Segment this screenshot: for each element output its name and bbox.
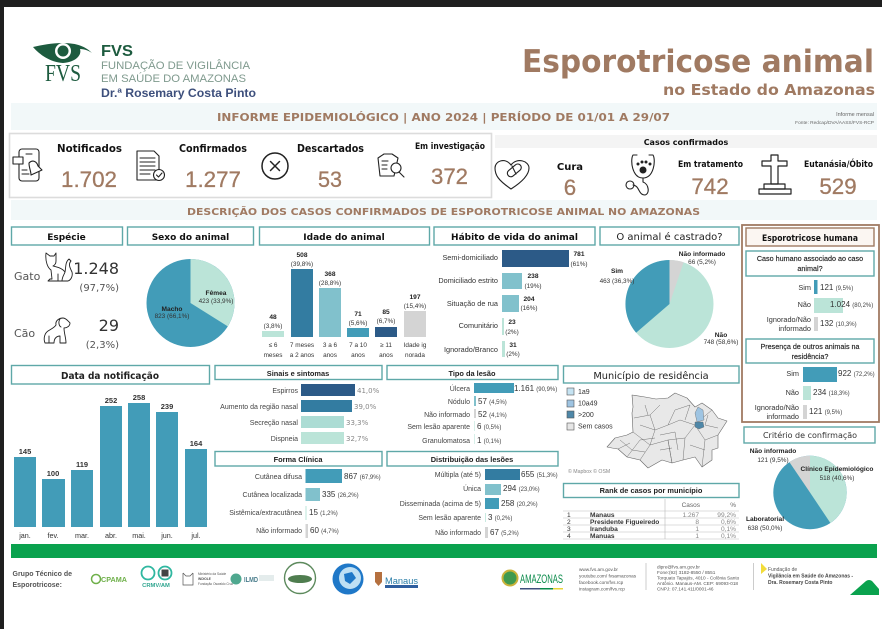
bar chart: symptoms: Aumento da região nasal [220, 404, 298, 411]
footer: FVS signature: Vigilância em Saúde do Amazonas - [768, 574, 853, 580]
bar chart: symptoms: Espirros [272, 388, 298, 395]
bar chart: lifestyle [438, 250, 588, 358]
bar chart: age: 85 [382, 309, 390, 316]
bar chart: months: abr. [105, 531, 117, 540]
footer: contact address: dipre@fvs.am.gov.br [657, 564, 700, 570]
question box: associated human case: Caso humano associado ao caso [757, 254, 863, 263]
section heading band: DESCRIÇÃO DOS CASOS CONFIRMADOS DE ESPOROTRICOSE ANIMAL NO AMAZONAS [187, 205, 700, 218]
bar chart: age: a 2 anos [290, 352, 314, 359]
bar chart: months: 100 [47, 469, 59, 478]
table: ranking: 3 [567, 526, 571, 533]
bar chart: months: 258 [133, 393, 145, 402]
bar chart: other animals: Ignorado/Não [755, 403, 799, 412]
icon: notification clipboard [13, 149, 42, 181]
bar chart: months: jan. [18, 531, 31, 540]
bar chart: lesion distribution: Única [463, 484, 481, 493]
bar chart: lesion distribution: Disseminada (acima de 5) [400, 501, 481, 508]
pie chart: neutered: Sim [611, 268, 623, 275]
species: dog: Cão [14, 327, 35, 340]
bar chart: age: anos [379, 352, 393, 359]
bar chart: other animals: Não [786, 388, 799, 397]
bar chart: lifestyle: Comunitário [459, 321, 498, 330]
heading: animal sex: Sexo do animal [152, 233, 229, 243]
bar chart: lifestyle: 781 [573, 251, 585, 258]
title [522, 44, 875, 99]
footer: web and social links [579, 567, 637, 592]
footer: FVS signature [753, 563, 879, 595]
species: cat: (97,7%) [79, 283, 119, 294]
bar chart: associated human case: 1.024 (80,2%) [830, 300, 873, 309]
logo: FVS: FVS [101, 43, 133, 60]
footer: web and social links: instagram.com/fvs.rcp [579, 586, 625, 592]
heading: species: Espécie [47, 232, 86, 243]
heading: signs and symptoms [215, 366, 382, 380]
bar chart: lifestyle: 238 [527, 273, 539, 280]
panel: human sporotrichosis [742, 225, 879, 422]
bar chart: lesion distribution: Múltipla (até 5) [435, 472, 481, 479]
map: Amazonas municipalities: © Mapbox © OSM [568, 468, 610, 475]
pie chart: sex: Macho [162, 306, 182, 313]
cure total [557, 162, 583, 200]
heading: signs and symptoms: Sinais e sintomas [267, 369, 329, 378]
bar chart: clinical form: Não informado [256, 528, 302, 535]
bar chart: other animals: 121 (9,5%) [809, 407, 842, 416]
bar chart: lifestyle: 204 [523, 296, 535, 303]
bar chart: age: (15,4%) [404, 303, 426, 310]
table: ranking: 1 [567, 512, 571, 519]
pie chart: neutered: Não [715, 332, 727, 339]
bar chart: age: 7 a 10 [349, 342, 367, 349]
pie chart: sex [146, 259, 235, 347]
species: cat [14, 253, 119, 294]
footer: web and social links: www.fvs.am.gov.br [579, 567, 618, 572]
bar chart: lesion type: 6 (0,5%) [477, 422, 501, 431]
pie chart: sex: 423 (33,9%) [199, 298, 233, 305]
heading: clinical form [215, 452, 382, 466]
question box: associated human case: animal? [797, 264, 823, 273]
heading: municipality: Município de residência [593, 370, 709, 382]
panel: species [12, 227, 122, 351]
pie chart: criterion: 638 (50,0%) [748, 525, 782, 532]
bar chart: other animals [755, 367, 875, 421]
panel: animal age [260, 227, 430, 359]
discarded total: 53 [318, 167, 342, 192]
table: ranking: Casos [682, 502, 701, 509]
cure total: Cura [557, 162, 583, 173]
bar chart: associated human case: Ignorado/Não [767, 315, 811, 324]
pie chart: criterion: 121 (9,5%) [757, 457, 789, 464]
bar chart: other animals: 234 (18,3%) [813, 388, 850, 397]
heading: lesion type: Tipo da lesão [448, 369, 496, 378]
bar chart: months: jul. [190, 531, 201, 540]
table: ranking: Iranduba [590, 526, 618, 533]
bar chart: age: Idade ig [404, 342, 427, 349]
bar chart: associated human case: 121 (9,5%) [820, 283, 853, 292]
bar chart: associated human case: Não [798, 300, 811, 309]
bar chart: lesion distribution: Sem lesão aparente [418, 515, 481, 522]
pie chart: neutered: 66 (5,2%) [688, 259, 716, 266]
footer: contact address [646, 563, 740, 592]
bar chart: lifestyle: (61%) [570, 261, 588, 268]
question box: other animals [746, 339, 874, 363]
bar chart: lesion type: Não informado [424, 412, 470, 419]
bar chart: age: ≤ 6 [269, 342, 278, 349]
bar chart: symptoms: 32,7% [346, 435, 369, 443]
logo: Ministério da Saúde [183, 572, 233, 586]
panel: signs and symptoms [215, 366, 382, 444]
bar chart: symptoms: 39,0% [354, 403, 377, 411]
bar chart: clinical form: 867 (67,9%) [344, 472, 381, 481]
species: dog: 29 [99, 316, 119, 335]
in treatment total [678, 160, 743, 199]
heading: lifestyle [434, 227, 595, 245]
bar chart: age: 48 [269, 314, 277, 321]
bar chart: age: norada [405, 352, 425, 359]
bar chart: age: meses [264, 352, 282, 359]
pie chart: neutered: Não informado [679, 251, 725, 258]
bar chart: lesion distribution: 258 (20,2%) [501, 499, 538, 508]
species: dog [14, 316, 119, 351]
footer: technical group label [12, 571, 72, 589]
pie chart: criterion: 518 (40,6%) [820, 475, 854, 482]
report period band: Informe mensal [836, 112, 874, 118]
bar chart: age: 7 meses [290, 342, 314, 349]
title: Esporotricose animal [522, 44, 874, 80]
report period band [11, 103, 877, 130]
discarded total: Descartados [297, 143, 364, 155]
bar chart: lifestyle: (19%) [524, 283, 542, 290]
pie chart: neutered [600, 251, 738, 348]
bar chart: associated human case: 132 (10,3%) [820, 319, 857, 328]
panel: clinical form [215, 452, 382, 538]
title: no Estado do Amazonas [663, 81, 875, 99]
map legend: 10a49 [578, 400, 598, 408]
heading: animal age [260, 227, 430, 245]
cure total: 6 [564, 175, 576, 200]
bar chart: clinical form: Cutânea localizada [242, 492, 302, 499]
bar chart: age: 197 [409, 294, 421, 301]
panel: confirmed case outcomes [495, 135, 877, 200]
notified total [57, 143, 122, 192]
in treatment total: Em tratamento [678, 160, 743, 170]
confirmed total: Confirmados [179, 143, 247, 155]
bar chart: associated human case: Sim [798, 283, 811, 292]
pie chart: criterion: Laboratorial [746, 516, 784, 523]
species: cat: Gato [14, 270, 41, 283]
bar chart: months: 239 [161, 402, 173, 411]
heading: municipality [564, 366, 739, 383]
bar chart: lesion type: Sem lesão aparente [407, 424, 470, 431]
icon: document with check [137, 151, 164, 180]
bar chart: lifestyle: Ignorado/Branco [444, 345, 498, 354]
heading: ranking: Rank de casos por município [600, 486, 703, 495]
logo: round blue seal [332, 564, 364, 594]
logo: Ministério da Saúde: Ministério da Saúde [198, 572, 226, 576]
panel: animal sex [128, 227, 254, 347]
footer: contact address: CNPJ: 07.141.411/0001-46 [657, 586, 714, 592]
panel: notification date [12, 366, 210, 540]
table: ranking: 0,6% [721, 519, 736, 526]
bar chart: lesion distribution: 67 (5,2%) [490, 528, 519, 537]
bar chart: clinical form: 60 (4,7%) [310, 526, 339, 535]
bar chart: months: jun. [160, 531, 173, 540]
pie chart: neutered: 748 (58,6%) [704, 339, 738, 346]
bar chart: months: fev. [47, 531, 59, 540]
pie chart: criterion [746, 448, 873, 532]
bar chart: lesion distribution: 655 (51,3%) [521, 470, 558, 479]
bar chart: clinical form: 335 (26,2%) [322, 490, 359, 499]
logo: FVS: FVS [45, 61, 81, 87]
footer: technical group label: Grupo Técnico de [12, 571, 72, 578]
map: Amazonas municipalities [568, 393, 727, 475]
logo: CPAMA [92, 574, 127, 584]
bar chart: age: (5,6%) [349, 320, 367, 327]
bar chart: lifestyle: Semi-domiciliado [442, 253, 498, 262]
bar chart: lifestyle: 31 [509, 342, 517, 349]
heading: human sporotrichosis: Esporotricose humana [762, 233, 858, 243]
logo: FVS: FUNDAÇÃO DE VIGILÂNCIA [101, 59, 251, 72]
confirmed total: 1.277 [185, 167, 241, 192]
euthanasia or death total: 529 [819, 174, 857, 199]
notified total: 1.702 [61, 167, 117, 192]
bar chart: months: mai. [132, 531, 146, 540]
icon: heart with bandage [495, 161, 529, 189]
bar chart: symptoms: 41,0% [357, 387, 380, 395]
logo: CRMV/AM: CRMV/AM [142, 583, 170, 589]
bar chart: lifestyle: (2%) [506, 351, 520, 358]
notified total: Notificados [57, 143, 122, 155]
bar chart: age: 71 [354, 311, 362, 318]
bar chart: months [14, 393, 207, 540]
pie chart: sex: 823 (66,1%) [155, 313, 189, 320]
bar chart: lifestyle: (16%) [520, 305, 538, 312]
heading: lifestyle: Hábito de vida do animal [451, 233, 578, 243]
bar chart: lifestyle: 23 [508, 319, 516, 326]
panel: neutered [600, 227, 739, 348]
bar chart: lifestyle: (2%) [505, 329, 519, 336]
heading: notification date [12, 366, 210, 384]
bar chart: clinical form: 15 (1,2%) [309, 508, 338, 517]
panel: lesion type [387, 366, 558, 445]
bar chart: lesion type: Granulomatosa [422, 438, 470, 445]
bar chart: lesion distribution: Não informado [435, 530, 481, 537]
icon: discarded x [262, 153, 288, 179]
table: ranking: Manuas [590, 533, 615, 540]
pie chart: criterion: Clínico Epidemiológico [801, 466, 873, 473]
logo: round green seal [284, 562, 316, 594]
logo: Ministério da Saúde: Fundação Oswaldo Cruz [198, 582, 233, 586]
bar chart: lesion distribution [400, 469, 558, 538]
under investigation total: Em investigação [415, 142, 485, 152]
logo: FVS: EM SAÚDE DO AMAZONAS [101, 72, 246, 85]
map legend: >200 [578, 412, 594, 419]
heading: animal age: Idade do animal [303, 233, 385, 243]
bar chart: symptoms: Dispneia [271, 436, 298, 443]
bar chart: symptoms: 33,3% [346, 419, 369, 427]
bar chart: age: ≥ 11 [380, 342, 392, 349]
heading: lesion distribution: Distribuição das lesões [431, 455, 513, 464]
panel: municipality of residence [564, 366, 739, 475]
bar chart: age: (39,8%) [291, 261, 313, 268]
footer: contact address: Antônio. Manaus-AM. CEP: 69093-018 [657, 581, 738, 586]
panel: lesion distribution [387, 452, 558, 538]
bar chart: symptoms: Secreção nasal [250, 420, 298, 427]
question box: other animals: residência? [792, 352, 828, 361]
logo: CRMV/AM [142, 566, 172, 589]
bar chart: lifestyle: Situação de rua [447, 299, 499, 308]
logo: CPAMA: CPAMA [101, 575, 127, 584]
euthanasia or death total: Eutanásia/Óbito [804, 158, 873, 170]
logo: Manaus: Manaus [385, 576, 418, 587]
table: ranking: 1 [695, 533, 699, 540]
heading: neutered: O animal é castrado? [616, 231, 723, 243]
bar chart: symptoms [220, 384, 380, 444]
bar chart: months: 119 [76, 460, 88, 469]
under investigation total [415, 142, 485, 189]
table: ranking: 0,1% [721, 533, 736, 540]
species: dog: (2,3%) [86, 340, 119, 351]
bar chart: age: (28,8%) [319, 280, 341, 287]
panel: confirmed case outcomes: Casos confirmados [644, 138, 729, 147]
icon: clipboard with magnifier [378, 154, 404, 177]
bar chart: other animals: informado [767, 412, 799, 421]
footer: FVS signature: Fundação de [768, 567, 797, 573]
bar chart: age [262, 252, 427, 359]
in treatment total: 742 [691, 174, 729, 199]
green footer bar [11, 544, 877, 558]
table: ranking: 2 [567, 519, 571, 526]
bar chart: associated human case: informado [779, 324, 811, 333]
panel: case totals [10, 134, 492, 198]
bar chart: lesion type: Nódulo [448, 399, 470, 406]
bar chart: age: 368 [324, 271, 336, 278]
footer: FVS signature: Dra. Rosemary Costa Pinto [768, 580, 832, 586]
bar chart: months: 252 [105, 396, 117, 405]
table: ranking: 4 [567, 533, 571, 540]
report period band: Fonte: Redcap/DVA/AASS/FVS-RCP [795, 120, 874, 126]
table: ranking: Presidente Figueiredo [590, 519, 659, 526]
species: cat: 1.248 [73, 259, 119, 278]
report period band: INFORME EPIDEMIOLÓGICO | ANO 2024 | PERÍODO DE 01/01 A 29/07 [217, 111, 670, 124]
icon: grave cross [759, 155, 791, 194]
pie chart: sex: Fêmea [206, 290, 227, 297]
bar chart: lesion type [407, 383, 557, 445]
bar chart: clinical form: Cutânea difusa [255, 474, 302, 481]
panel: lifestyle [434, 227, 595, 358]
table: ranking: Manaus [590, 512, 615, 519]
heading: ranking [564, 484, 739, 498]
logo: Ministério da Saúde: INDIOLE [198, 577, 211, 581]
footer: contact address: Fone:(92) 3182-8550 / 8551 [657, 570, 716, 575]
question box: other animals: Presença de outros animais na [760, 342, 860, 351]
bar chart: clinical form: Sistêmica/extracutânea [229, 510, 302, 517]
bar chart: months: mar. [75, 531, 89, 540]
pie chart: neutered: 463 (36,3%) [600, 278, 634, 285]
bar chart: lesion distribution: 294 (23,0%) [503, 484, 540, 493]
bar chart: age: (6,7%) [377, 318, 395, 325]
footer: web and social links: facebook.com/fvs.rcp [579, 580, 624, 585]
table: ranking: 1.267 [682, 512, 699, 519]
table: ranking: 8 [695, 519, 699, 526]
bar chart: lesion type: 57 (4,5%) [478, 397, 507, 406]
under investigation total: 372 [431, 164, 468, 189]
logo: ILMD [230, 574, 274, 584]
logo: ILMD: ILMD [244, 577, 258, 584]
logo: Manaus [375, 572, 418, 588]
bar chart: associated human case [767, 280, 873, 333]
bar chart: lifestyle: Domiciliado estrito [438, 276, 498, 285]
bar chart: age: 508 [296, 252, 308, 259]
table: ranking: 0,1% [721, 526, 736, 533]
bar chart: lesion type: Úlcera [450, 384, 470, 393]
logo: FVS: Dr.ª Rosemary Costa Pinto [101, 86, 256, 100]
bar chart: other animals: 922 (72,2%) [838, 369, 875, 378]
confirmed total [179, 143, 247, 192]
discarded total [297, 143, 364, 192]
heading: notification date: Data da notificação [61, 371, 159, 382]
panel: municipality ranking [563, 484, 739, 540]
table: ranking: 1 [695, 526, 699, 533]
footer: contact address: Torquato Tapajós, 4010 - Colônia Santo [657, 576, 740, 580]
bar chart: months: 164 [190, 439, 203, 448]
map legend: Sem casos [578, 424, 613, 430]
icon: stethoscope with paw [626, 155, 654, 195]
bar chart: age: 3 a 6 [323, 342, 338, 349]
question box: associated human case [746, 251, 874, 276]
euthanasia or death total [804, 158, 873, 199]
footer: technical group label: Esporotricose: [12, 582, 62, 589]
bar chart: lesion distribution: 3 (0,2%) [488, 513, 512, 522]
bar chart: clinical form [229, 469, 381, 538]
logo: Amazonas government [502, 570, 563, 590]
bar chart: age: anos [323, 352, 337, 359]
bar chart: lesion type: 1 (0,1%) [477, 436, 501, 445]
table: ranking: % [730, 502, 736, 509]
heading: confirmation criterion: Critério de confirmação [763, 430, 857, 440]
heading: clinical form: Forma Clínica [274, 455, 323, 464]
logo: Amazonas government: AMAZONAS [520, 572, 563, 586]
bar chart: other animals: Sim [786, 369, 799, 378]
bar chart: age: (3,8%) [264, 323, 282, 330]
bar chart: age: anos [351, 352, 365, 359]
heading: lesion type [387, 366, 558, 380]
bar chart: months: 145 [19, 447, 31, 456]
bar chart: lesion type: 52 (4,1%) [478, 410, 507, 419]
heading: lesion distribution [387, 452, 558, 466]
map legend: 1a9 [578, 389, 590, 396]
table: ranking: 99,2% [717, 512, 736, 519]
section heading band [11, 200, 877, 220]
footer: web and social links: youtube.com/ fvsamazonas [579, 574, 637, 578]
heading: human sporotrichosis [746, 228, 874, 246]
logo: FVS [33, 43, 256, 100]
table: ranking [563, 499, 739, 540]
map legend [567, 388, 613, 430]
panel: confirmation criterion [744, 427, 875, 532]
pie chart: criterion: Não informado [750, 448, 796, 455]
bar chart: lesion type: 1.161 (90,9%) [514, 384, 557, 393]
